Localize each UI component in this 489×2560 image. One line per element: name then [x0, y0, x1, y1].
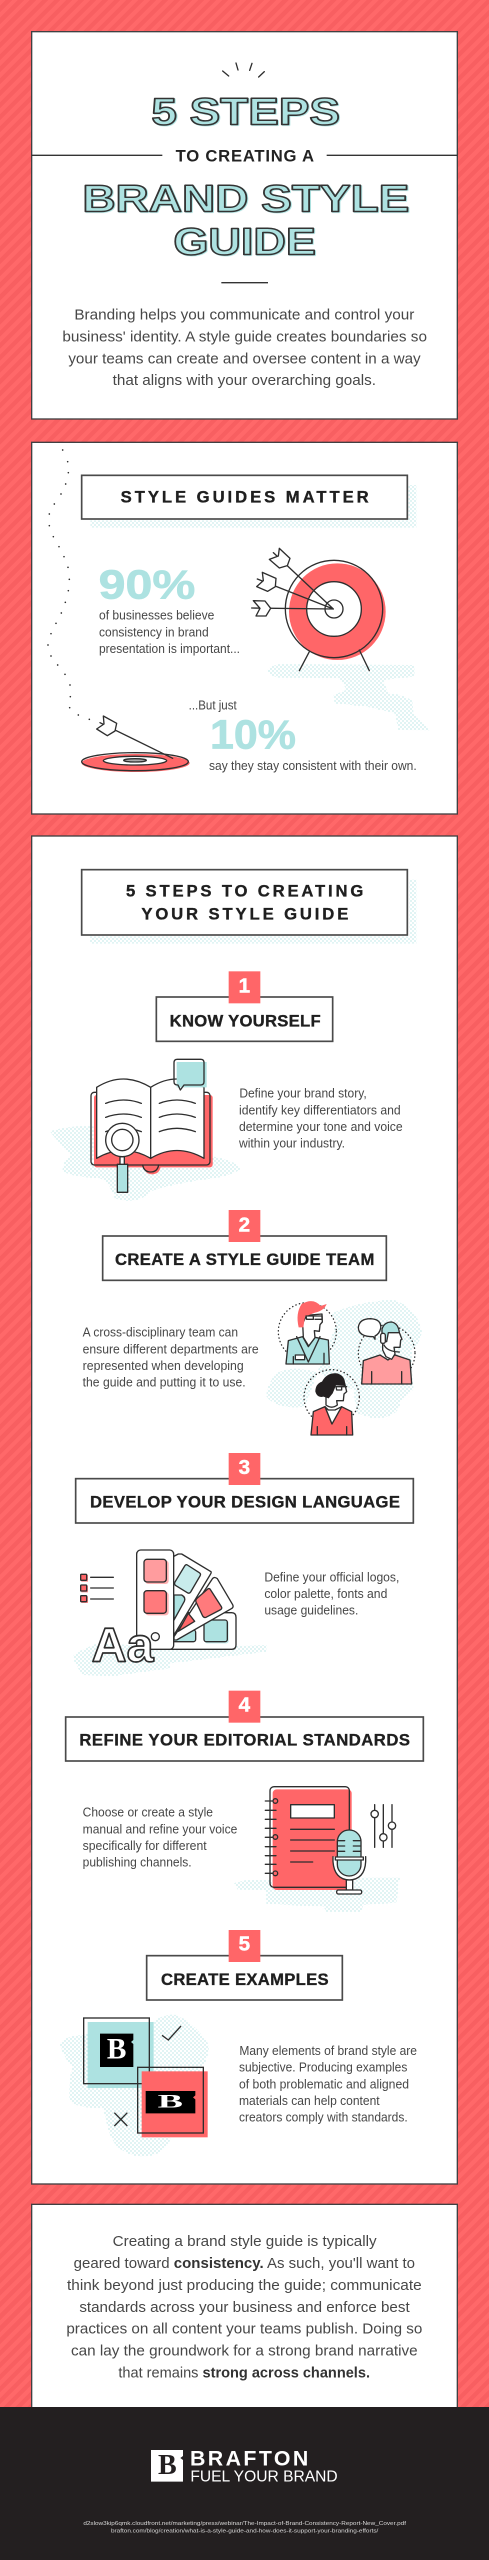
- step 5 heading: CREATE EXAMPLES: [161, 1970, 329, 1989]
- intro text: business' identity. A style guide creates boundaries so: [62, 328, 427, 345]
- step 1 text: determine your tone and voice: [239, 1119, 403, 1134]
- step 5 text: of both problematic and aligned: [239, 2076, 409, 2091]
- step 4 text: specifically for different: [83, 1838, 207, 1853]
- icon: fallen target with arrow: [82, 716, 190, 772]
- panel: intro: [32, 32, 457, 419]
- illustration: notebook, microphone and sliders: [234, 1787, 400, 1912]
- step 5 text: creators comply with standards.: [239, 2110, 408, 2125]
- intro text: your teams can create and oversee content in a way: [68, 350, 421, 367]
- title: 5 steps: 5 STEPS: [151, 92, 340, 134]
- step 2 text: represented when developing: [83, 1358, 244, 1373]
- icon: cross mark: [114, 2113, 127, 2126]
- intro text: that aligns with your overarching goals.: [113, 372, 376, 389]
- swatch card 2: [167, 1554, 211, 1635]
- step 1 text: [238, 1086, 403, 1151]
- heading: 5 steps to creating your style guide: [82, 870, 417, 943]
- microphone: [333, 1830, 366, 1894]
- icon: check mark: [162, 2026, 181, 2040]
- sources: d2slow3kip6qmk.cloudfront.net/marketing/press/webinar/The-Impact-of-Brand-Consistency-Report-New_Cover.pdf: [83, 2521, 406, 2527]
- icon: book with magnifier: [50, 1059, 241, 1201]
- panel: five steps: [32, 836, 457, 2184]
- illustration: logo examples: [60, 2015, 209, 2157]
- step 1 text: identify key differentiators and: [239, 1102, 401, 1117]
- heading: 5 steps to creating your style guide: 5 STEPS TO CREATING: [126, 882, 363, 901]
- step 5 text: materials can help content: [239, 2093, 380, 2108]
- step 3 text: color palette, fonts and: [264, 1586, 387, 1601]
- person 2: [358, 1319, 412, 1384]
- intro text: [62, 306, 427, 389]
- panel: style guides matter: [32, 442, 457, 814]
- illustration: team of three people: [267, 1300, 422, 1435]
- stat: 10%: [189, 698, 417, 773]
- person 1: [286, 1301, 329, 1364]
- conclusion text: [66, 2233, 422, 2381]
- stat: 10%: ...But just: [189, 698, 237, 713]
- step 5 heading: [147, 1930, 342, 2000]
- panel: conclusion: [32, 2204, 457, 2458]
- step 2 text: ensure different departments are: [83, 1341, 259, 1356]
- step 1 text: within your industry.: [238, 1136, 345, 1151]
- step 2 heading: CREATE A STYLE GUIDE TEAM: [115, 1250, 374, 1269]
- title: brand style: BRAND STYLE: [82, 178, 409, 220]
- good logo example: [84, 2018, 154, 2088]
- conclusion text: geared toward consistency. As such, you'll want to: [74, 2255, 415, 2272]
- swatch card 1: [137, 1550, 174, 1649]
- footer: [0, 2407, 489, 2560]
- step 3 text: usage guidelines.: [264, 1603, 358, 1618]
- logo: Brafton: BRAFTON: [190, 2447, 308, 2471]
- step 2 heading: 2: [239, 1214, 250, 1237]
- step 1 heading: 1: [239, 974, 250, 997]
- sliders: [371, 1805, 396, 1847]
- step 3 heading: 3: [239, 1456, 250, 1479]
- type specimen: Aa: [92, 1618, 155, 1672]
- stat: 10%: 10%: [210, 712, 296, 758]
- icon: sparkle lines: [223, 63, 264, 77]
- swatch card 3: [174, 1577, 233, 1640]
- divider with subtitle: TO CREATING A: [176, 146, 314, 165]
- list bullets: [81, 1574, 113, 1603]
- conclusion text: practices on all content your teams publish. Doing so: [66, 2321, 422, 2338]
- heading: style guides matter: [82, 475, 417, 527]
- stat: 90%: presentation is important...: [99, 641, 240, 656]
- step 1 heading: KNOW YOURSELF: [170, 1011, 321, 1030]
- step 4 text: [83, 1805, 237, 1870]
- step 3 text: Define your official logos,: [264, 1569, 399, 1584]
- step 5 text: [239, 2043, 417, 2125]
- good logo example: B: [107, 2034, 126, 2066]
- step 4 text: Choose or create a style: [83, 1805, 213, 1820]
- step 5 heading: 5: [239, 1933, 250, 1956]
- heading: style guides matter: STYLE GUIDES MATTER: [121, 488, 369, 507]
- step 5 text: subjective. Producing examples: [239, 2060, 408, 2075]
- conclusion text: that remains strong across channels.: [118, 2364, 370, 2381]
- step 1 heading: [156, 971, 333, 1041]
- logo: Brafton: FUEL YOUR BRAND: [190, 2468, 338, 2485]
- illustration: colour swatches and type: [73, 1550, 267, 1676]
- logo: Brafton: B: [158, 2450, 177, 2481]
- stat: 90%: of businesses believe: [99, 608, 214, 623]
- conclusion text: can lay the groundwork for a strong brand narrative: [71, 2343, 418, 2360]
- heading: 5 steps to creating your style guide: YOUR STYLE GUIDE: [141, 905, 348, 924]
- step 2 text: the guide and putting it to use.: [83, 1375, 246, 1390]
- step 3 heading: DEVELOP YOUR DESIGN LANGUAGE: [90, 1493, 400, 1512]
- dotted arrow flight path: [48, 450, 89, 719]
- swatch card 4: [170, 1613, 236, 1649]
- stat: 90%: 90%: [99, 562, 195, 608]
- title: guide: GUIDE: [173, 222, 316, 264]
- intro text: Branding helps you communicate and control your: [74, 306, 414, 323]
- stat: 90%: [99, 562, 240, 656]
- conclusion text: think beyond just producing the guide; communicate: [67, 2277, 422, 2294]
- conclusion text: Creating a brand style guide is typically: [113, 2233, 377, 2250]
- step 4 heading: 4: [239, 1694, 251, 1717]
- step 5 text: Many elements of brand style are: [239, 2043, 417, 2058]
- step 4 text: publishing channels.: [83, 1855, 192, 1870]
- conclusion text: standards across your business and enforce best: [79, 2299, 410, 2316]
- bad logo example: B: [158, 2091, 183, 2112]
- stat: 10%: say they stay consistent with their own.: [209, 758, 417, 773]
- stat: 90%: consistency in brand: [99, 624, 209, 639]
- step 3 heading: [76, 1453, 413, 1523]
- step 1 text: Define your brand story,: [239, 1086, 367, 1101]
- step 2 text: A cross-disciplinary team can: [83, 1325, 238, 1340]
- icon: target with arrows: [252, 548, 429, 731]
- step 4 heading: REFINE YOUR EDITORIAL STANDARDS: [79, 1730, 410, 1749]
- step 2 heading: [103, 1210, 386, 1280]
- sources: [83, 2521, 406, 2535]
- step 4 text: manual and refine your voice: [83, 1821, 237, 1836]
- person 3: [311, 1373, 353, 1435]
- logo: Brafton: [151, 2447, 338, 2485]
- step 2 text: [83, 1325, 259, 1390]
- step 4 heading: [66, 1691, 423, 1761]
- sources: brafton.com/blog/creation/what-is-a-style-guide-and-how-does-it-support-your-branding-efforts/: [111, 2529, 379, 2535]
- step 3 text: [264, 1569, 399, 1618]
- bad logo example: [138, 2067, 208, 2137]
